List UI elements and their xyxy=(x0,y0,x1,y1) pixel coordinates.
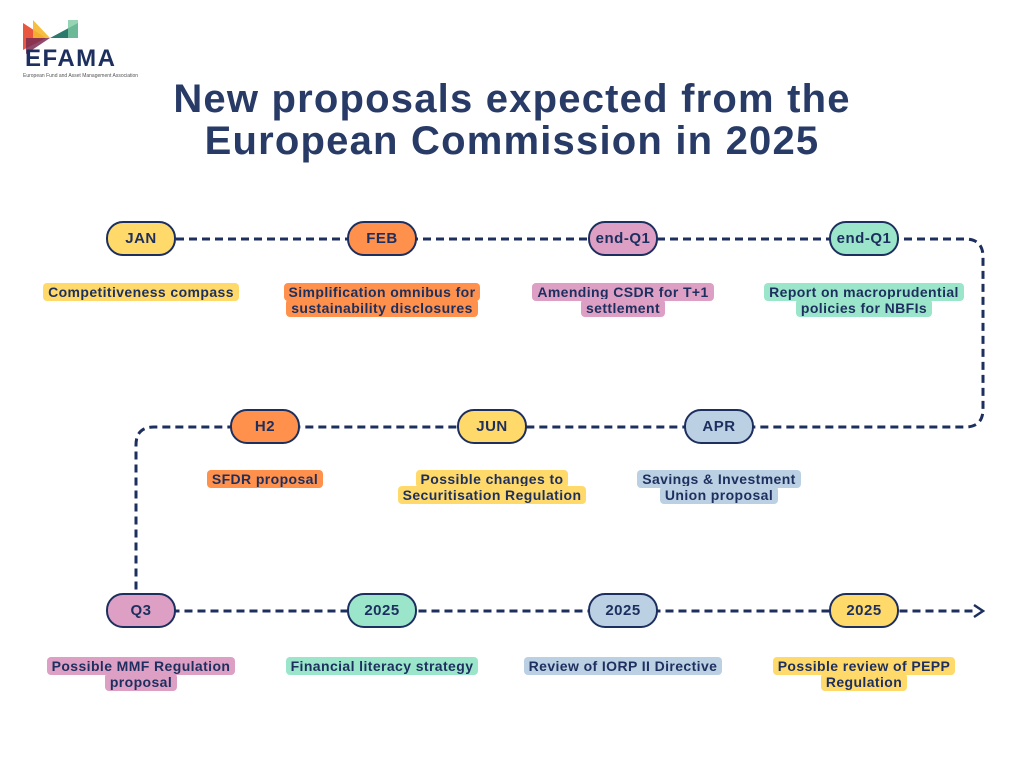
pill JAN xyxy=(106,221,176,256)
logo: EFAMA xyxy=(25,45,116,72)
pill 2025 a: 2025 xyxy=(364,602,400,619)
pill 2025 c xyxy=(829,593,899,628)
label MMF xyxy=(47,657,235,691)
pill JUN: JUN xyxy=(476,418,508,435)
pill APR: APR xyxy=(702,418,736,435)
label Competitiveness: Competitiveness compass xyxy=(48,284,234,300)
label Securitisation: Possible changes to xyxy=(420,471,563,487)
label MMF: Possible MMF Regulation xyxy=(52,658,230,674)
pill 2025 c: 2025 xyxy=(846,602,882,619)
logo xyxy=(23,20,138,79)
label SIU: Union proposal xyxy=(665,487,773,503)
logo: European Fund and Asset Management Association xyxy=(23,73,138,79)
label CSDR: Amending CSDR for T+1 xyxy=(537,284,709,300)
pill end-Q1 green: end-Q1 xyxy=(837,230,891,247)
pill end-Q1 xyxy=(588,221,658,256)
label Securitisation: Securitisation Regulation xyxy=(403,487,581,503)
label SIU: Savings & Investment xyxy=(642,471,796,487)
label Securitisation xyxy=(398,470,586,504)
title: European Commission in 2025 xyxy=(205,119,819,163)
pill 2025 b xyxy=(588,593,658,628)
title: New proposals expected from the xyxy=(173,77,851,121)
pill Q3: Q3 xyxy=(130,602,152,619)
label literacy: Financial literacy strategy xyxy=(291,658,473,674)
pill H2 xyxy=(230,409,300,444)
label SFDR: SFDR proposal xyxy=(212,471,318,487)
label macroprudential xyxy=(764,283,964,317)
label PEPP: Regulation xyxy=(826,674,902,690)
label Simplification: sustainability disclosures xyxy=(291,300,473,316)
label Simplification xyxy=(284,283,480,317)
label SIU xyxy=(637,470,801,504)
label macroprudential: Report on macroprudential xyxy=(769,284,959,300)
pill H2: H2 xyxy=(255,418,275,435)
label IORP: Review of IORP II Directive xyxy=(529,658,717,674)
pill end-Q1 green xyxy=(829,221,899,256)
label MMF: proposal xyxy=(110,674,172,690)
pill 2025 a xyxy=(347,593,417,628)
pill FEB: FEB xyxy=(366,230,398,247)
label CSDR: settlement xyxy=(586,300,660,316)
label macroprudential: policies for NBFIs xyxy=(801,300,927,316)
pill 2025 b: 2025 xyxy=(605,602,641,619)
title xyxy=(173,77,851,163)
pill FEB xyxy=(347,221,417,256)
pill Q3 xyxy=(106,593,176,628)
pill JAN: JAN xyxy=(125,230,157,247)
label PEPP xyxy=(773,657,955,691)
pill APR xyxy=(684,409,754,444)
label CSDR xyxy=(532,283,714,317)
label PEPP: Possible review of PEPP xyxy=(778,658,950,674)
pill JUN xyxy=(457,409,527,444)
pill end-Q1: end-Q1 xyxy=(596,230,650,247)
label Simplification: Simplification omnibus for xyxy=(289,284,475,300)
